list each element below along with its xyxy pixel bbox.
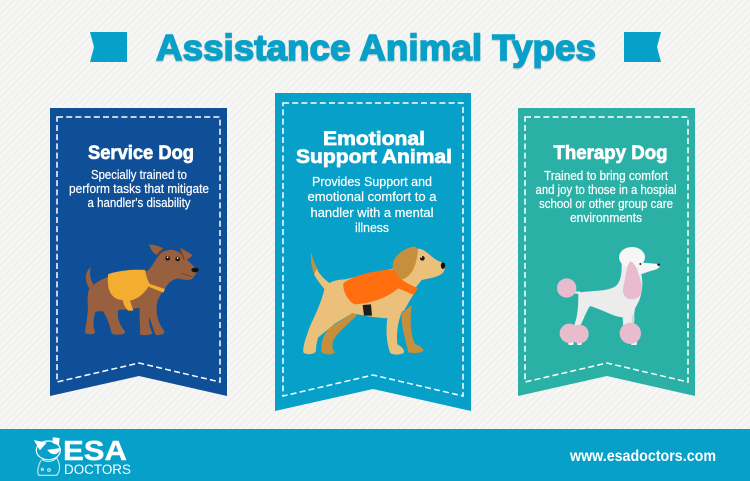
panel: therapy dog <box>518 108 695 396</box>
logo wordmark DOCTORS: DOCTORS <box>64 462 131 477</box>
therapy dog description: Trained to bring comfort <box>544 169 668 183</box>
therapy dog description: environments <box>570 211 642 225</box>
emotional support description: handler with a mental <box>310 206 434 220</box>
therapy dog description: school or other group care <box>539 197 673 211</box>
panel: service dog <box>50 108 227 396</box>
emotional support heading: Emotional <box>323 129 425 150</box>
therapy dog heading: Therapy Dog <box>554 143 668 164</box>
logo wordmark ESA: ESA <box>63 435 127 466</box>
footer bar <box>0 429 750 481</box>
emotional support heading <box>296 129 452 168</box>
service dog description: perform tasks that mitigate <box>69 182 209 196</box>
heading: Assistance Animal Types <box>156 27 596 68</box>
emotional support description <box>308 175 437 235</box>
emotional support description: emotional comfort to a <box>308 190 437 204</box>
service dog description <box>69 168 209 210</box>
service dog description: a handler's disability <box>88 196 191 210</box>
right flag icon <box>624 32 661 62</box>
logo: ESA Doctors <box>35 435 131 477</box>
emotional support description: Provides Support and <box>312 175 432 189</box>
emotional support heading: Support Animal <box>296 147 452 168</box>
website url: www.esadoctors.com <box>569 448 716 465</box>
panel: emotional support animal <box>275 93 471 411</box>
service dog heading: Service Dog <box>88 143 194 164</box>
left flag icon <box>90 32 127 62</box>
icon: white poodle with pink pompoms <box>557 247 660 345</box>
therapy dog description: and joy to those in a hospial <box>536 183 676 197</box>
service dog description: Specially trained to <box>91 168 187 182</box>
therapy dog description <box>536 169 676 225</box>
icon: brown dog with yellow vest <box>85 244 199 335</box>
icon: golden dog with orange vest <box>303 247 445 355</box>
emotional support description: illness <box>355 221 389 235</box>
title with flags <box>90 27 661 68</box>
icon: logo dog outline <box>35 438 60 475</box>
